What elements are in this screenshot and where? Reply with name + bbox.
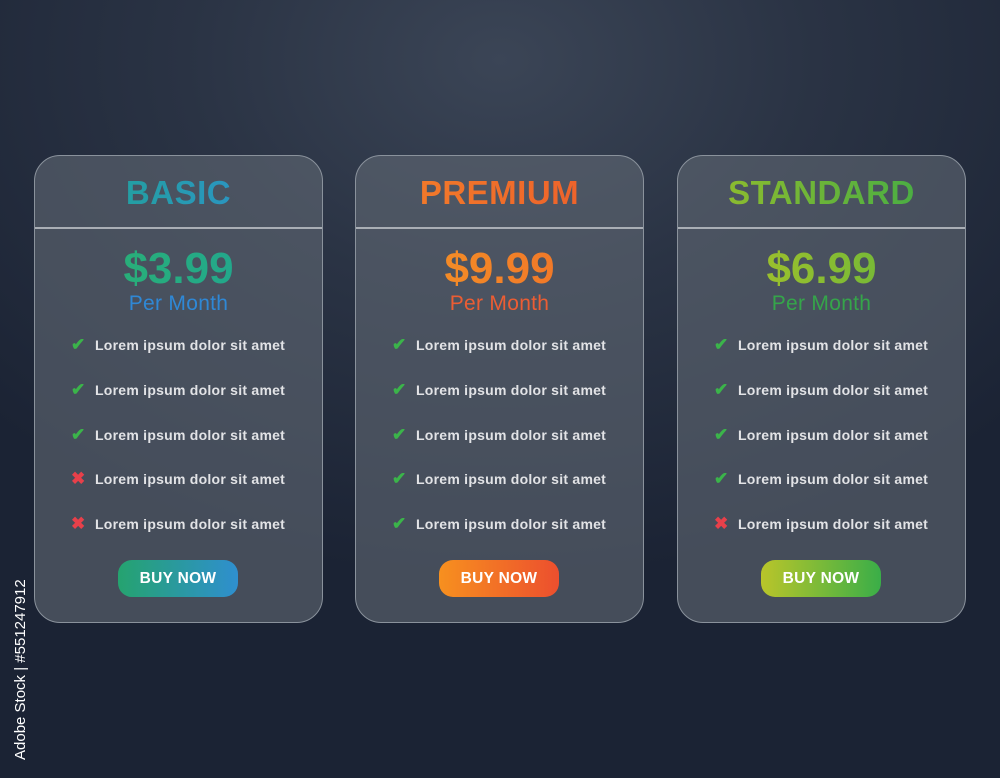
feature list: premium — [392, 335, 606, 533]
feature list: standard: Lorem ipsum dolor sit amet — [738, 471, 928, 487]
header: basic — [35, 156, 322, 229]
button: basic — [118, 560, 238, 597]
period: premium: Per Month — [450, 292, 549, 315]
price: premium — [356, 244, 643, 294]
panel: premium — [355, 155, 644, 623]
feature list: premium: ✔ — [392, 380, 406, 399]
panel: basic — [34, 155, 323, 623]
panel: standard — [677, 155, 966, 623]
feature list: basic: ✖ — [71, 469, 86, 488]
header: standard: STANDARD — [728, 174, 915, 211]
feature list: basic: Lorem ipsum dolor sit amet — [95, 516, 285, 532]
feature list: premium: ✔ — [392, 425, 406, 444]
feature list: premium: ✔ — [392, 469, 406, 488]
feature list: premium: Lorem ipsum dolor sit amet — [416, 337, 606, 353]
feature list: standard: Lorem ipsum dolor sit amet — [738, 337, 928, 353]
price: premium: $9.99 — [444, 244, 555, 293]
feature list: standard: ✔ — [714, 425, 728, 444]
feature list: premium: Lorem ipsum dolor sit amet — [416, 471, 606, 487]
price: basic: $3.99 — [123, 244, 234, 293]
feature list: basic: ✔ — [71, 380, 86, 399]
feature list: premium: Lorem ipsum dolor sit amet — [416, 427, 606, 443]
feature list: basic: Lorem ipsum dolor sit amet — [95, 427, 285, 443]
feature list: premium: Lorem ipsum dolor sit amet — [416, 516, 606, 532]
period: basic: Per Month — [129, 292, 228, 315]
header: standard — [678, 156, 965, 229]
feature list: basic: Lorem ipsum dolor sit amet — [95, 471, 285, 487]
watermark id: Adobe Stock | #551247912 — [12, 579, 29, 760]
feature list: premium: ✔ — [392, 335, 406, 354]
period: standard: Per Month — [772, 292, 871, 315]
feature list: standard: ✖ — [714, 514, 728, 533]
button: basic: BUY NOW — [140, 570, 216, 587]
price: basic — [35, 244, 322, 294]
button: standard — [761, 560, 881, 597]
button: premium — [439, 560, 559, 597]
header: basic: BASIC — [126, 174, 231, 211]
button: standard: BUY NOW — [783, 570, 859, 587]
feature list: premium: Lorem ipsum dolor sit amet — [416, 382, 606, 398]
feature list: basic: ✖ — [71, 514, 86, 533]
feature list: basic — [71, 335, 285, 533]
feature list: standard — [714, 335, 928, 533]
feature list: basic: ✔ — [71, 425, 86, 444]
price: standard: $6.99 — [766, 244, 877, 293]
button: premium: BUY NOW — [461, 570, 537, 587]
feature list: standard: ✔ — [714, 335, 728, 354]
feature list: standard: Lorem ipsum dolor sit amet — [738, 427, 928, 443]
feature list: basic: ✔ — [71, 335, 86, 354]
header: premium — [356, 156, 643, 229]
feature list: standard: ✔ — [714, 380, 728, 399]
price: standard — [678, 244, 965, 294]
feature list: basic: Lorem ipsum dolor sit amet — [95, 337, 285, 353]
feature list: standard: Lorem ipsum dolor sit amet — [738, 382, 928, 398]
feature list: basic: Lorem ipsum dolor sit amet — [95, 382, 285, 398]
feature list: standard: ✔ — [714, 469, 728, 488]
header: premium: PREMIUM — [420, 174, 579, 211]
feature list: standard: Lorem ipsum dolor sit amet — [738, 516, 928, 532]
feature list: premium: ✔ — [392, 514, 406, 533]
